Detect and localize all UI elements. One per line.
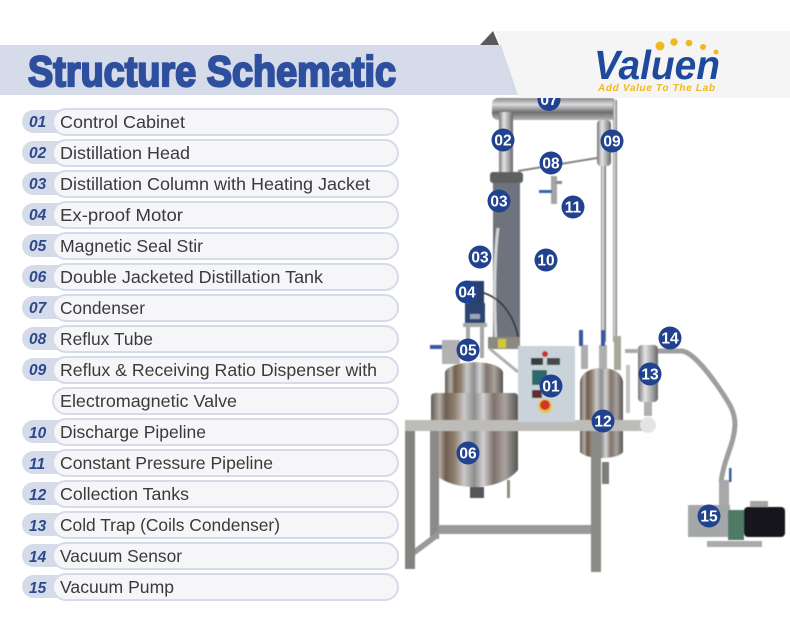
badge: 12 xyxy=(592,410,614,432)
badge: 02 xyxy=(492,128,514,152)
badge: 05 xyxy=(456,338,480,362)
logo xyxy=(594,38,720,94)
item 09 xyxy=(22,357,398,414)
item 08 xyxy=(22,326,398,352)
badge: 15: 15 xyxy=(700,508,718,526)
item 07 xyxy=(22,295,398,321)
table frame xyxy=(405,420,653,572)
badge: 04: 04 xyxy=(458,284,476,302)
badge: 09: 09 xyxy=(603,134,621,150)
dispenser vessel xyxy=(597,120,611,166)
item 09: 09 xyxy=(29,362,47,379)
item 10: Discharge Pipeline xyxy=(60,422,206,442)
item 13: 13 xyxy=(29,518,47,535)
item 06 xyxy=(22,264,398,290)
logo tagline: Add Value To The Lab xyxy=(597,83,715,94)
tank jacket xyxy=(431,393,518,487)
item 07: Condenser xyxy=(60,298,145,318)
item 01: 01 xyxy=(29,114,46,131)
item 11 xyxy=(22,450,398,476)
reflux valve xyxy=(539,176,562,204)
badge: 11 xyxy=(562,196,584,218)
item 08: 08 xyxy=(29,331,47,348)
item 07: 07 xyxy=(29,300,48,317)
item 04: Ex-proof Motor xyxy=(60,205,183,225)
item 04: 04 xyxy=(29,207,47,224)
item 08: Reflux Tube xyxy=(60,329,153,349)
cold trap xyxy=(625,345,658,433)
right pipes xyxy=(601,100,617,342)
badge: 07: 07 xyxy=(540,92,558,109)
badge: 05: 05 xyxy=(459,342,477,360)
vacuum pump xyxy=(688,468,785,547)
tank outlet xyxy=(470,480,510,498)
badge: 14: 14 xyxy=(661,330,679,348)
item 12: Collection Tanks xyxy=(60,484,189,504)
collection tank fittings xyxy=(579,330,621,484)
badge: 02: 02 xyxy=(494,132,512,150)
column flange xyxy=(490,172,523,183)
badge: 06: 06 xyxy=(459,446,477,462)
badge: 10: 10 xyxy=(537,252,555,270)
badge: 10 xyxy=(534,248,558,272)
badge: 13: 13 xyxy=(641,366,659,384)
item 14: Vacuum Sensor xyxy=(60,546,182,566)
item 01 xyxy=(22,109,398,135)
item 05: 05 xyxy=(29,238,47,255)
item 15: Vacuum Pump xyxy=(60,577,174,597)
dark corner triangle xyxy=(480,31,499,45)
item 14: 14 xyxy=(29,549,47,566)
item 01: Control Cabinet xyxy=(60,112,185,132)
badge: 09 xyxy=(600,130,624,152)
motor stand xyxy=(463,323,487,358)
badge: 03 lower xyxy=(468,246,492,268)
badge: 08: 08 xyxy=(542,156,560,172)
item 11: Constant Pressure Pipeline xyxy=(60,453,273,473)
item 06: Double Jacketed Distillation Tank xyxy=(60,267,323,287)
item 15: 15 xyxy=(29,580,47,597)
item 10 xyxy=(22,419,398,445)
header band xyxy=(0,45,518,95)
item 15 xyxy=(22,574,398,600)
badge: 13 xyxy=(638,362,662,386)
collection tank xyxy=(580,368,623,458)
badge: 03 upper: 03 xyxy=(490,194,508,210)
item 11: 11 xyxy=(29,456,45,473)
item 09: Electromagnetic Valve xyxy=(60,391,237,411)
item 04 xyxy=(22,202,398,228)
badge: 03 lower: 03 xyxy=(471,250,489,266)
item 03: Distillation Column with Heating Jacket xyxy=(60,174,370,194)
badge: 07 xyxy=(538,88,560,111)
black cable xyxy=(484,293,519,340)
heating jacket xyxy=(493,183,520,337)
tank lid dome xyxy=(445,362,503,393)
badges on equipment xyxy=(456,128,720,528)
item 09: Reflux & Receiving Ratio Dispenser with xyxy=(60,360,377,380)
item 14 xyxy=(22,543,398,569)
badge: 03 upper xyxy=(488,190,510,212)
badge: 08 xyxy=(540,152,562,174)
logo panel xyxy=(495,31,790,98)
parts list xyxy=(22,109,398,600)
item 13 xyxy=(22,512,398,538)
item 02 xyxy=(22,140,398,166)
distillation head xyxy=(499,112,513,174)
condenser pipe xyxy=(492,98,617,120)
item 10: 10 xyxy=(29,425,47,442)
reflux tube xyxy=(518,158,597,171)
item 12 xyxy=(22,481,398,507)
badge: 14 xyxy=(658,326,682,350)
item 05 xyxy=(22,233,398,259)
item 13: Cold Trap (Coils Condenser) xyxy=(60,515,280,535)
item 03 xyxy=(22,171,398,197)
item 06: 06 xyxy=(29,269,47,286)
tank valve left xyxy=(430,340,460,364)
item 12: 12 xyxy=(29,487,47,504)
logo wordmark: Valuen xyxy=(594,42,720,88)
badge: 01 xyxy=(540,374,562,398)
item 02: 02 xyxy=(29,145,47,162)
column fittings xyxy=(488,337,520,372)
equipment photo illustration xyxy=(405,98,785,572)
jacket tube xyxy=(495,228,498,345)
logo dots xyxy=(656,38,718,54)
item 05: Magnetic Seal Stir xyxy=(60,236,203,256)
motor xyxy=(465,281,485,324)
badge: 01: 01 xyxy=(542,378,560,396)
badge: 06 xyxy=(456,442,480,464)
badge: 15 xyxy=(698,504,720,528)
vacuum hose xyxy=(658,351,735,482)
title: Structure Schematic xyxy=(28,48,396,96)
control cabinet xyxy=(518,346,575,422)
item 03: 03 xyxy=(29,176,47,193)
badge: 11: 11 xyxy=(565,200,582,216)
badge: 12: 12 xyxy=(594,414,612,430)
badge: 04 xyxy=(456,280,478,304)
item 02: Distillation Head xyxy=(60,143,190,163)
